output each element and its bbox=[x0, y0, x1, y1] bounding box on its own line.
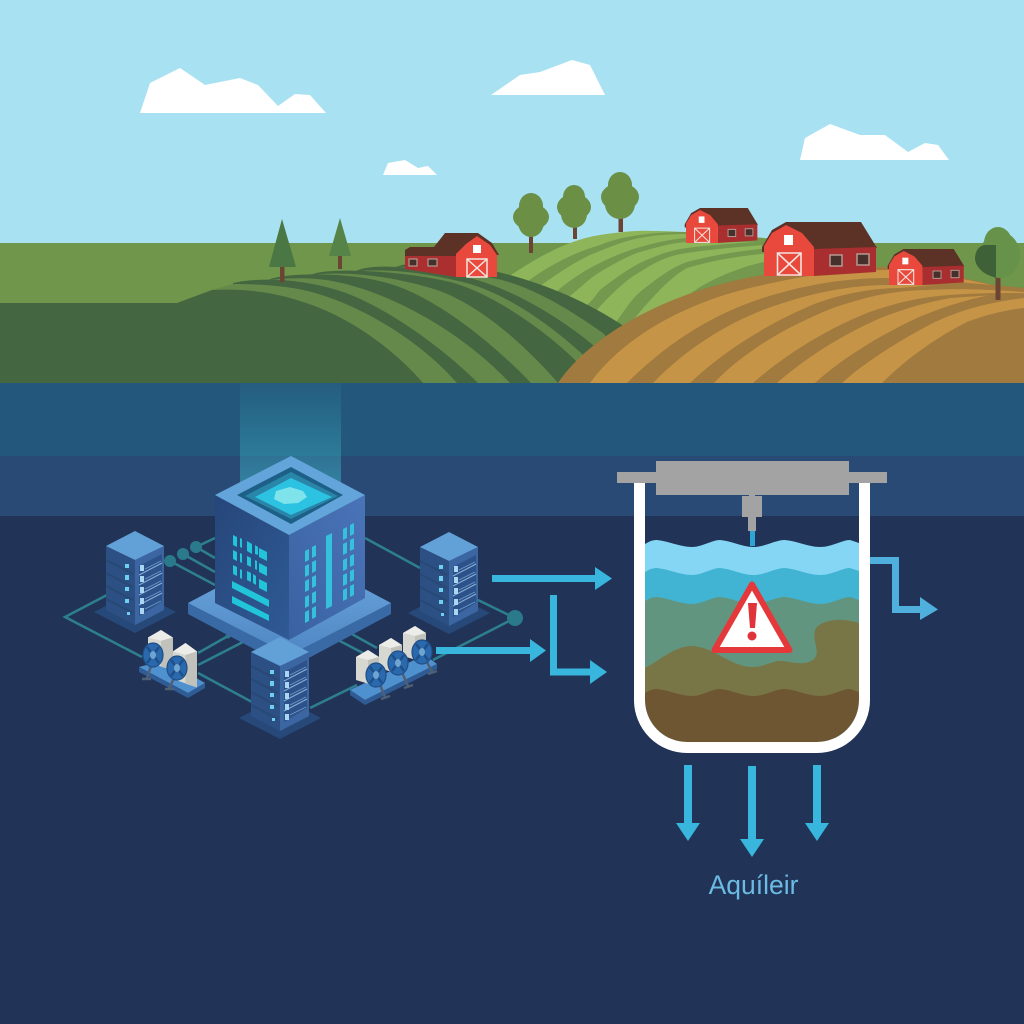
arrow: elbow to tank bbox=[550, 595, 607, 684]
underground band: upper bbox=[0, 383, 1024, 456]
network wiring bbox=[65, 538, 523, 708]
barn: left bbox=[405, 233, 499, 277]
rack: front bbox=[239, 637, 321, 739]
pump head bbox=[617, 461, 887, 531]
deciduous trees bbox=[513, 172, 639, 253]
pine trees bbox=[269, 218, 351, 282]
rack: right bbox=[408, 532, 490, 634]
arrow: seepage right bbox=[805, 765, 829, 841]
aquifer tank bbox=[617, 461, 887, 753]
light beam bbox=[240, 383, 341, 495]
main data centre building bbox=[188, 456, 391, 668]
underground band: middle bbox=[0, 456, 1024, 517]
golden right field bbox=[558, 267, 1024, 383]
arrow: tank outflow bbox=[870, 557, 938, 620]
building walls bbox=[215, 495, 365, 640]
windows: left wall bbox=[232, 535, 269, 621]
windows: right wall bbox=[305, 523, 354, 623]
sky bbox=[0, 0, 1024, 244]
tank strata bbox=[645, 540, 859, 742]
tank glass outline bbox=[640, 483, 865, 748]
light green middle field bbox=[505, 231, 790, 383]
aquifer label: Aquíleir bbox=[709, 870, 799, 900]
arrow: lower right of data centre bbox=[436, 639, 546, 662]
building roof bbox=[215, 456, 365, 535]
rack: left bbox=[94, 531, 176, 633]
dark green left field bbox=[0, 263, 680, 383]
barn: right bbox=[888, 249, 964, 285]
arrow: seepage centre bbox=[740, 766, 764, 857]
cooling units: right bbox=[350, 626, 437, 705]
underground band: deep bbox=[0, 516, 1024, 1024]
building plinth bbox=[188, 549, 391, 668]
barn: top centre bbox=[685, 208, 758, 243]
distant grass bbox=[0, 243, 1024, 383]
barn: large bbox=[762, 222, 877, 276]
water stream bbox=[750, 531, 755, 546]
tree: right edge bbox=[975, 227, 1020, 300]
warning sign bbox=[714, 584, 790, 650]
clouds bbox=[140, 60, 949, 175]
arrow: top right of data centre bbox=[492, 567, 612, 590]
cooling units: left bbox=[139, 630, 205, 698]
arrow: seepage left bbox=[676, 765, 700, 841]
